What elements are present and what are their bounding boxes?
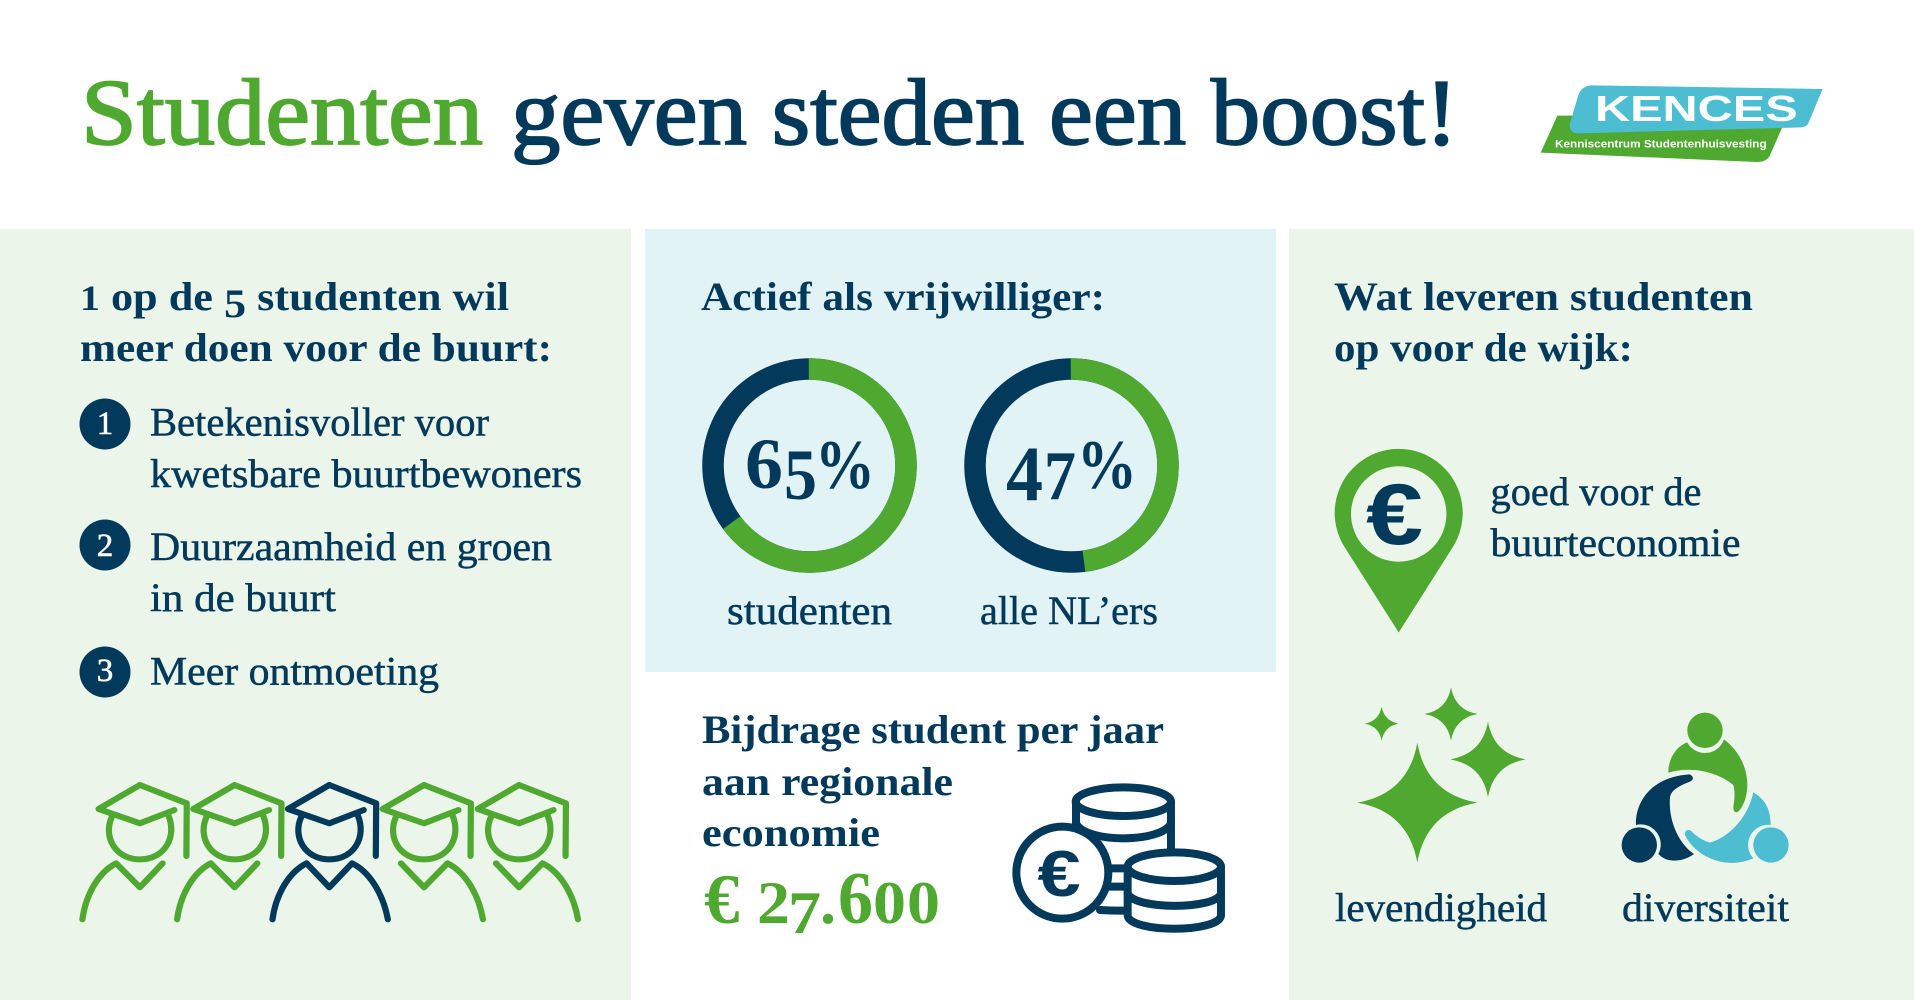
donut chart: 65% studenten: studenten [727,588,892,633]
donut chart: 47% alle NL'ers: 7 [1044,438,1076,515]
donut chart: 47% alle NL'ers [975,369,1168,633]
icon: KENCES logo: KENCES [1595,88,1798,129]
list item 2: Duurzaamheid en groen [150,524,552,569]
heading: Wat leveren studenten: Wat leveren studenten [1334,274,1753,319]
donut chart: 47% alle NL'ers: 4 [1006,430,1043,517]
heading: 1 op de 5: studenten wil [246,274,509,319]
donut chart: 47% alle NL'ers: alle NL’ers [980,588,1158,633]
panel: neighbourhood benefits [1289,229,1914,1000]
heading: Bijdrage student: Bijdrage student per jaar [702,707,1164,752]
heading: Bijdrage student: aan regionale [702,759,953,804]
donut chart: 65% studenten [713,369,906,633]
heading: Wat leveren studenten [1334,274,1753,370]
amount: € 27.600: 6 [838,858,873,940]
donut chart: 65% studenten: 5 [784,435,817,515]
amount: € 27.600: . [820,866,836,937]
list item 1: Betekenisvoller voor [150,400,489,444]
list item 2: 2 [97,528,113,564]
icon: coins: € [1037,837,1081,910]
icon: KENCES logo [1541,85,1823,162]
icon: coins [1016,787,1221,929]
list item 2: in de buurt [150,575,336,620]
panel: neighbourhood wishes [0,229,631,1000]
icon: diversity people [1622,713,1789,863]
icon: five graduates [82,785,578,919]
heading: Bijdrage student: economie [702,810,880,855]
donut chart: 65% studenten: 6 [745,424,783,504]
icon: map pin with euro: € [1366,467,1423,563]
list item 3: Meer ontmoeting [150,648,439,694]
heading: 1 op de 5: 5 [224,281,246,326]
heading: 1 op de 5 [80,274,552,370]
heading: Wat leveren studenten: op voor de wijk: [1334,325,1633,370]
list item 1: 1 [97,406,113,442]
amount: € 27.600: € [704,861,740,939]
heading: Bijdrage student [702,707,1164,855]
list item 3 [80,646,439,698]
text: diversiteit: diversiteit [1622,885,1789,930]
heading: Actief als vrijwilliger: Actief als vrijwilliger: [701,274,1105,319]
icon: map pin with euro [1335,449,1463,632]
icon: KENCES logo: Kenniscentrum Studentenhuisvesting [1555,138,1767,150]
text: goed voor de buurteconomie [1490,469,1740,565]
list item 2 [80,520,552,620]
list item 1 [80,398,582,496]
amount: € 27.600: 2 [757,870,790,936]
donut chart: 65% studenten: % [815,427,875,504]
donut chart: 47% alle NL'ers: % [1077,427,1137,504]
title: geven steden een boost! [511,61,1458,165]
panel: volunteers [645,229,1276,672]
list item 1: kwetsbare buurtbewoners [150,451,582,496]
heading: 1 op de 5: meer doen voor de buurt: [80,325,552,370]
amount: € 27.600 [704,858,940,946]
amount: € 27.600: 0 [873,870,906,936]
list item 3: 3 [97,653,113,689]
title [81,61,1458,165]
panel: contribution per student [702,707,1221,946]
amount: € 27.600: 0 [907,870,940,936]
text: levendigheid: levendigheid [1335,885,1547,930]
title: Studenten [81,61,483,165]
text: goed voor de buurteconomie: buurteconomie [1490,520,1740,565]
icon: sparkles [1357,687,1526,863]
heading: 1 op de 5: 1 op de [80,274,202,319]
text: goed voor de buurteconomie: goed voor de [1490,469,1702,514]
amount: € 27.600: 7 [788,880,821,946]
